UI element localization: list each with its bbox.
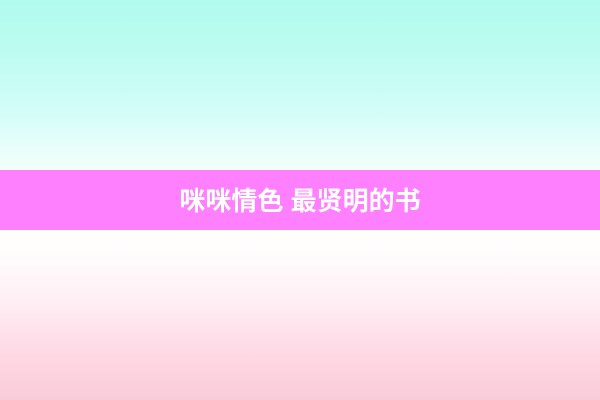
panel: bottom pink gradient background <box>0 230 600 400</box>
panel: top mint gradient background <box>0 0 600 170</box>
panel: magenta title band <box>0 170 600 230</box>
title: 咪咪情色 最贤明的书 <box>179 186 421 216</box>
